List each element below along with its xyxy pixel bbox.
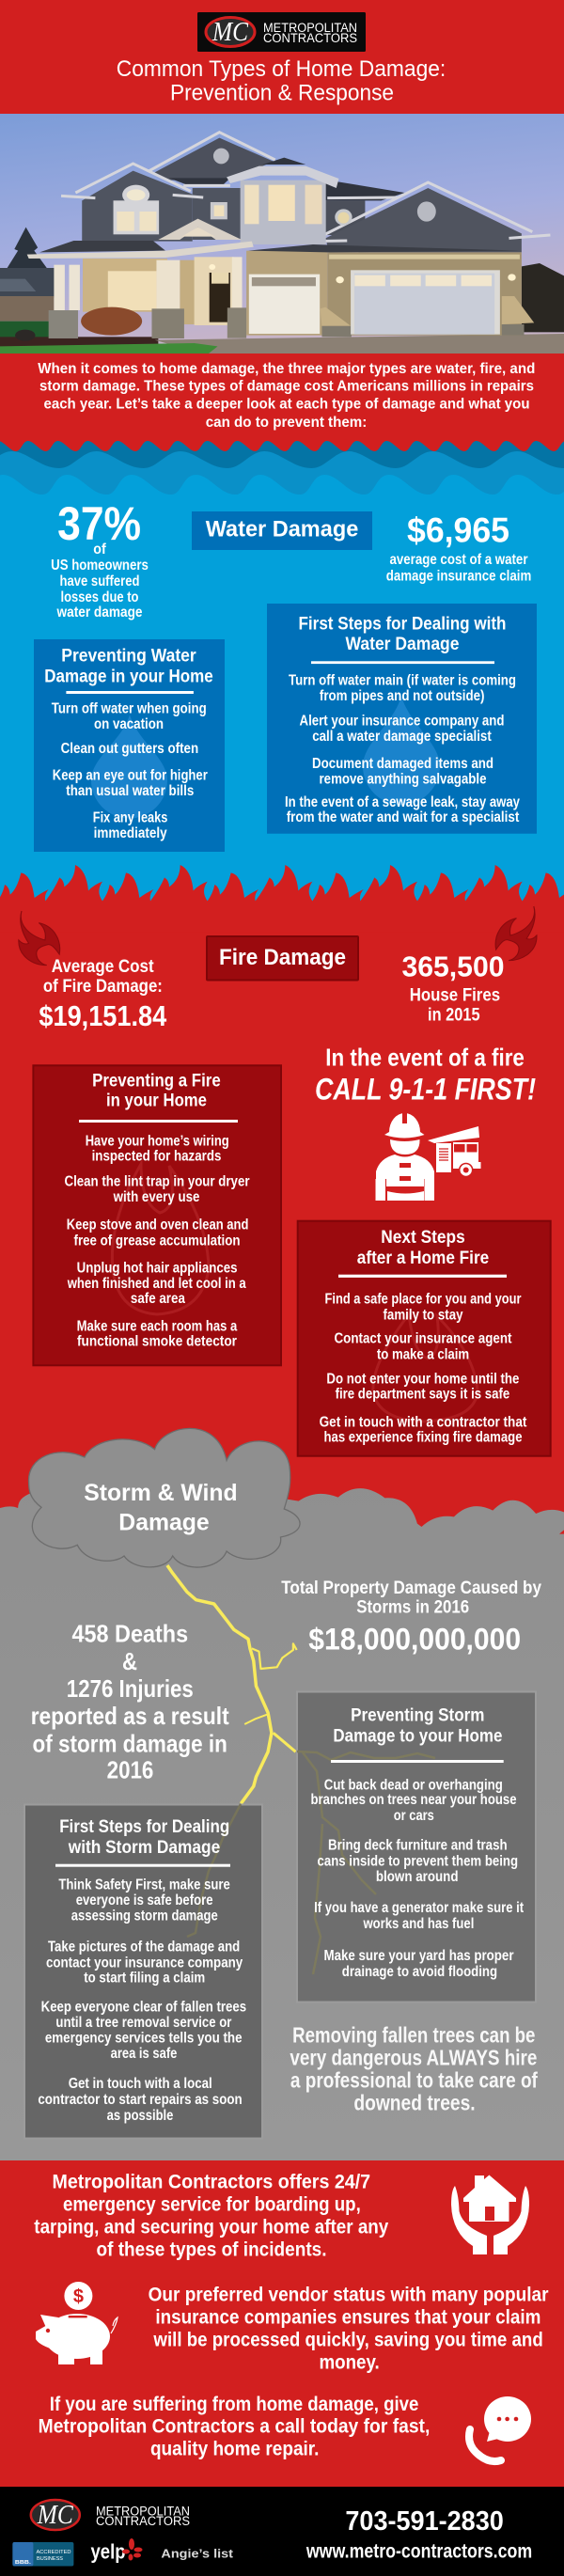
text: emergency service: of these types of incidents. [96,2238,327,2260]
stat: total property damage [281,1578,541,1656]
stat: average cost of fire damage: $19,151.84 [39,999,167,1032]
panel: preventing a fire: Preventing a Fire [92,1071,221,1091]
heading: Fire Damage: Fire Damage [219,945,346,970]
panel: preventing a fire: Clean the lint trap in your dryer [64,1173,250,1189]
panel: preventing water damage: Turn off water when going [52,700,207,716]
panel: preventing a fire: Make sure each room has a [77,1318,238,1334]
shrub [81,307,142,336]
icon: firefighter with truck [376,1113,481,1201]
heading: Storm and Wind Damage: Damage [118,1509,210,1535]
panel: preventing a fire: safe area [131,1291,185,1307]
stat: deaths and injuries: 1276 Injuries [67,1674,194,1703]
panel: first steps water: Turn off water main (if water is coming [289,672,516,688]
footer logo: METROPOLITAN [96,2505,190,2519]
upper windows [114,200,159,234]
panel: first steps storm damage: as possible [107,2108,174,2124]
panel: preventing a fire: when finished and let cool in a [67,1276,246,1292]
porch roof [39,241,165,252]
entry [195,257,234,325]
panel: preventing storm damage [297,1692,536,2003]
panel: preventing a fire: inspected for hazards [92,1148,221,1164]
panel: next steps after fire: Find a safe place for you and your [325,1292,521,1308]
wave edge of red intro panel [0,348,564,451]
footer logo: CONTRACTORS [96,2514,190,2528]
photo: house at dusk [0,114,564,353]
stat: average claim cost: $6,965 [407,511,509,550]
heading: Storm and Wind Damage [84,1480,238,1535]
stat: average claim cost: average cost of a water [389,552,528,568]
stat: 37 percent: have suffered [60,573,139,589]
panel: preventing a fire: free of grease accumulation [73,1233,241,1249]
panel: next steps after fire: family to stay [384,1307,463,1323]
stat: 37 percent: losses due to [60,589,139,605]
panel: first steps storm damage: area is safe [111,2046,178,2062]
text: preferred vendor: money. [319,2352,380,2374]
intro text: can do to prevent them: [206,415,367,431]
panel: first steps storm damage: assessing storm damage [71,1908,218,1924]
panel: next steps after fire: Contact your insurance agent [335,1331,511,1347]
panel: first steps storm damage: Get in touch with a local [69,2076,212,2092]
panel: preventing water damage: Damage in your Home [44,667,213,686]
panel: preventing water damage [34,639,225,852]
stat: total property damage: $18,000,000,000 [308,1622,521,1656]
text: call to action [39,2394,430,2460]
icon: piggy bank: $ [73,2286,84,2307]
big cloud [29,1428,300,1567]
panel: first steps storm damage: everyone is safe before [76,1893,213,1908]
panel: next steps after fire: to make a claim [377,1346,469,1362]
stat: deaths and injuries [31,1620,229,1784]
bay window [241,181,326,244]
text: emergency service: emergency service for boarding up, [63,2194,361,2216]
panel: preventing storm damage: drainage to avoid flooding [342,1964,497,1980]
panel: first steps water: remove anything salvagable [320,771,487,787]
logo: MC [212,18,248,47]
heading: Storm and Wind Damage: Storm & Wind [84,1480,238,1506]
stat: average cost of fire damage: of Fire Damage: [43,976,163,997]
panel: preventing a fire: Unplug hot hair appliances [77,1260,238,1276]
panel: next steps after fire: has experience fixing fire damage [323,1429,523,1445]
stat: house fires: 365,500 [402,950,504,982]
intro text: When it comes to home damage, the three major types are water, fire, and [38,361,535,377]
stat: house fires: House Fires [410,986,500,1006]
panel: next steps after fire: Get in touch with a contractor that [320,1414,526,1430]
intro text: storm damage. These types of damage cost Americans millions in repairs [39,379,534,395]
roof trims [61,133,550,242]
intro text [38,361,535,431]
heading: Water Damage [192,511,372,550]
logo: METROPOLITAN [263,21,357,35]
panel: preventing water damage: Fix any leaks [93,809,167,825]
panel: first steps water: from the water and wait for a specialist [287,809,519,825]
panel: preventing a fire: with every use [113,1189,200,1205]
badge: BBB accredited: BBB. [15,2560,31,2566]
stat: 37 percent: US homeowners [51,558,149,573]
panel: next steps after fire [298,1221,551,1456]
title: Common Types of Home Damage: [117,56,446,82]
panel: first steps storm damage: Keep everyone clear of fallen trees [41,1999,246,2015]
closing red panel background [0,2160,564,2487]
panel: preventing water damage: Keep an eye out for higher [53,767,208,783]
panel: preventing storm damage: Preventing Storm [351,1706,485,1726]
panel: preventing storm damage: branches on trees near your house [310,1792,517,1808]
stat: average claim cost: damage insurance claim [386,568,531,584]
intro text: each year. Let’s take a deeper look at each type of damage and what you [43,397,530,413]
panel: preventing water damage: on vacation [94,716,164,732]
panel: first steps storm damage: First Steps for Dealing [59,1817,229,1837]
panel: preventing storm damage: Bring deck furniture and trash [328,1838,508,1854]
stat: 37 percent: 37% [57,497,141,550]
panel: first steps storm damage: to start filing a claim [84,1970,205,1986]
panel: preventing water damage: Preventing Water [61,646,196,666]
text: emergency service: Metropolitan Contractors offers 24/7 [53,2171,370,2192]
stat: 37 percent [51,497,149,620]
panel: first steps storm damage: with Storm Damage [68,1838,220,1858]
text: call to action: Metropolitan Contractors a call today for fast, [39,2416,430,2438]
title: Prevention & Response [170,81,394,106]
wave layer: dark blue [0,437,564,468]
stat: deaths and injuries: 458 Deaths [71,1620,188,1648]
stat: 37 percent: water damage [56,605,143,620]
text: emergency service [34,2171,389,2260]
panel: preventing a fire: Have your home’s wiring [86,1133,229,1149]
badge: Angie's list: Angie’s list [161,2547,234,2561]
storm section background with cloud edge [0,1469,564,2160]
logo [197,12,366,52]
badge: yelp: yelp [90,2540,126,2564]
water section background [0,442,564,912]
columns [54,265,65,310]
siding [82,171,193,242]
text: call to action: If you are suffering from home damage, give [50,2394,418,2415]
footer logo [31,2500,190,2530]
panel: first steps water: from pipes and not outside) [320,688,485,704]
lightning bolt [167,1565,297,1803]
panel: preventing water damage: Clean out gutters often [61,741,198,757]
callout: call 911: In the event of a fire [325,1043,525,1071]
stat: 37 percent: of [93,542,106,558]
stat: deaths and injuries: of storm damage in [32,1729,227,1757]
stat: average claim cost [386,511,531,584]
stat: deaths and injuries: 2016 [107,1756,153,1784]
text: preferred vendor [149,2285,549,2374]
panel: first steps storm damage: Take pictures of the damage and [48,1939,240,1955]
panel: next steps after fire: fire department says it is safe [336,1386,510,1402]
stat: average cost of fire damage: Average Cost [52,956,154,977]
panel: first steps water: Document damaged items and [312,756,494,772]
panel: preventing a fire [33,1065,281,1365]
footer logo: MC [37,2501,73,2530]
garage [249,275,320,334]
flame edge of fire section [0,865,564,933]
panel: first steps storm damage: contact your insurance company [46,1955,243,1971]
panel: next steps after fire: Do not enter your home until the [326,1371,520,1387]
panel: first steps water: First Steps for Dealing with [299,614,506,634]
icon: piggy bank [36,2282,118,2364]
heading: Fire Damage [207,936,358,980]
panel: next steps after fire: after a Home Fire [357,1249,489,1268]
panel: first steps storm damage: emergency services tells you the [45,2031,243,2047]
panel: first steps storm damage: until a tree removal service or [55,2015,231,2031]
panel: preventing a fire: Keep stove and oven clean and [67,1217,248,1233]
panel: preventing storm damage: If you have a generator make sure it [314,1900,524,1916]
stat: deaths and injuries: & [122,1647,137,1675]
callout: removing fallen trees: downed trees. [353,2090,476,2114]
stone [49,310,78,338]
panel: preventing a fire: functional smoke detector [77,1334,237,1350]
panel: first steps storm damage: contractor to start repairs as soon [38,2092,243,2108]
panel: preventing storm damage: Damage to your Home [333,1727,502,1747]
panel: first steps storm damage: Think Safety First, make sure [58,1877,230,1893]
text: emergency service: tarping, and securing your home after any [34,2217,389,2238]
panel: preventing storm damage: or cars [394,1808,434,1824]
panel: preventing storm damage: blown around [376,1869,459,1885]
lower wall [327,252,522,336]
footer bar [0,2487,564,2576]
panel: preventing water damage: immediately [94,825,167,841]
stat: house fires [402,950,504,1026]
icon: flame left [19,911,60,966]
panel: preventing storm damage: cans inside to prevent them being [318,1853,518,1869]
stat: house fires: in 2015 [428,1006,480,1026]
panel: first steps water: call a water damage specialist [312,729,492,745]
callout: removing fallen trees [290,2023,538,2114]
heading: Water Damage: Water Damage [206,517,358,542]
icon: flame right [495,906,537,961]
panel: preventing storm damage: works and has fuel [363,1916,474,1932]
title [117,56,446,106]
icon: house in hands [451,2175,529,2254]
stat: average cost of fire damage [39,956,167,1032]
panel: first steps storm damage [24,1804,262,2138]
icon: phone and chat bubble [469,2396,531,2461]
panel: first steps water [267,604,537,834]
panel: preventing water damage: than usual water bills [66,783,194,799]
badge: BBB accredited: ACCREDITED [36,2550,71,2555]
panel: preventing storm damage: Make sure your yard has proper [323,1948,513,1964]
panel: first steps water: Water Damage [346,635,459,654]
text: call to action: quality home repair. [150,2439,319,2460]
badge: BBB accredited: BUSINESS [37,2556,63,2562]
stat: deaths and injuries: reported as a result [31,1702,229,1730]
callout: call 911 [315,1043,536,1106]
panel: preventing storm damage: Cut back dead or overhanging [324,1777,503,1793]
contact: phone number: 703-591-2830 [345,2506,504,2537]
panel: first steps water: In the event of a sewage leak, stay away [285,794,520,810]
panel: preventing a fire: in your Home [106,1092,207,1111]
panel: next steps after fire: Next Steps [381,1228,465,1248]
badge: BBB accredited [12,2542,73,2567]
wave layer: medium blue [0,437,564,495]
stat: total property damage: Storms in 2016 [356,1597,469,1618]
panel: first steps water: Alert your insurance company and [299,713,504,729]
logo: CONTRACTORS [263,31,357,45]
